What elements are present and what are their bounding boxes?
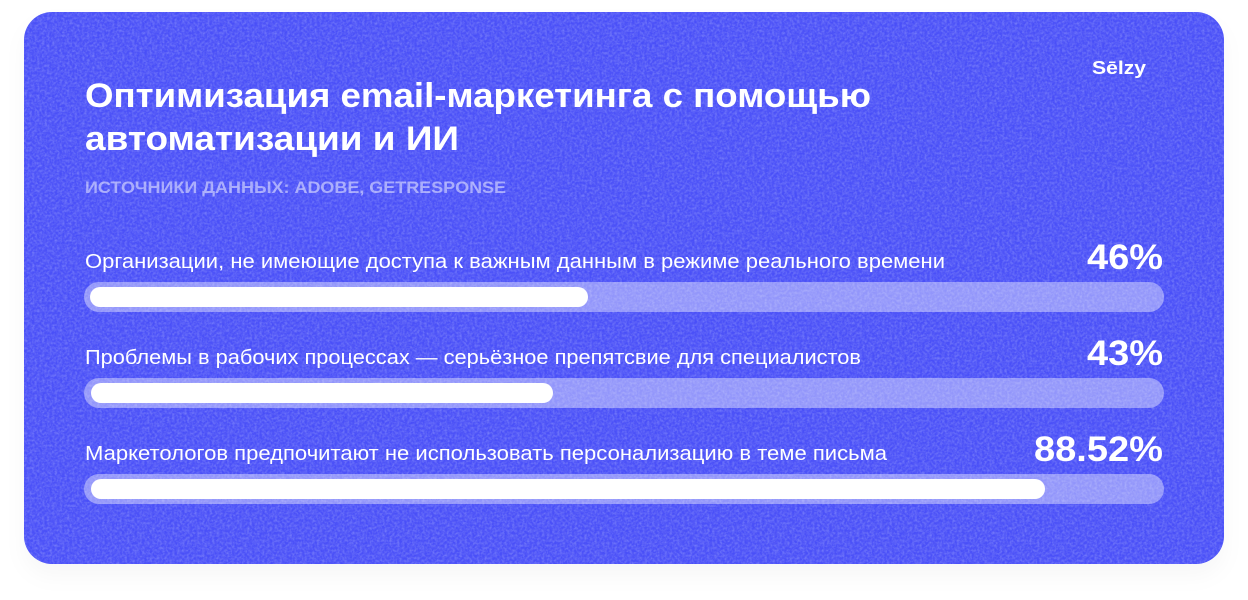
title: автоматизации и ИИ <box>85 120 459 158</box>
row 2 label: Проблемы в рабочих процессах — серьёзное препятсвие для специалистов <box>85 346 861 369</box>
title <box>85 77 871 158</box>
row 3 bar <box>84 474 1164 504</box>
subtitle: data sources: ИСТОЧНИКИ ДАННЫХ: ADOBE, GETRESPONSE <box>85 178 506 197</box>
row 1 value: 46% <box>1087 238 1163 277</box>
title: Оптимизация email-маркетинга с помощью <box>85 77 871 115</box>
row 3: personalization <box>84 430 1164 504</box>
logo: Selzy: Sēlzy <box>1092 58 1146 78</box>
row 2 value: 43% <box>1087 334 1163 373</box>
row 1 label: Организации, не имеющие доступа к важным данным в режиме реального времени <box>85 250 945 273</box>
row 3 value: 88.52% <box>1034 430 1163 469</box>
row 2 bar <box>84 378 1164 408</box>
row 1: real-time data access <box>84 238 1164 312</box>
row 2: workflow problems <box>84 334 1164 408</box>
row 1 bar <box>84 282 1164 312</box>
row 3 label: Маркетологов предпочитают не использовать персонализацию в теме письма <box>85 442 888 465</box>
